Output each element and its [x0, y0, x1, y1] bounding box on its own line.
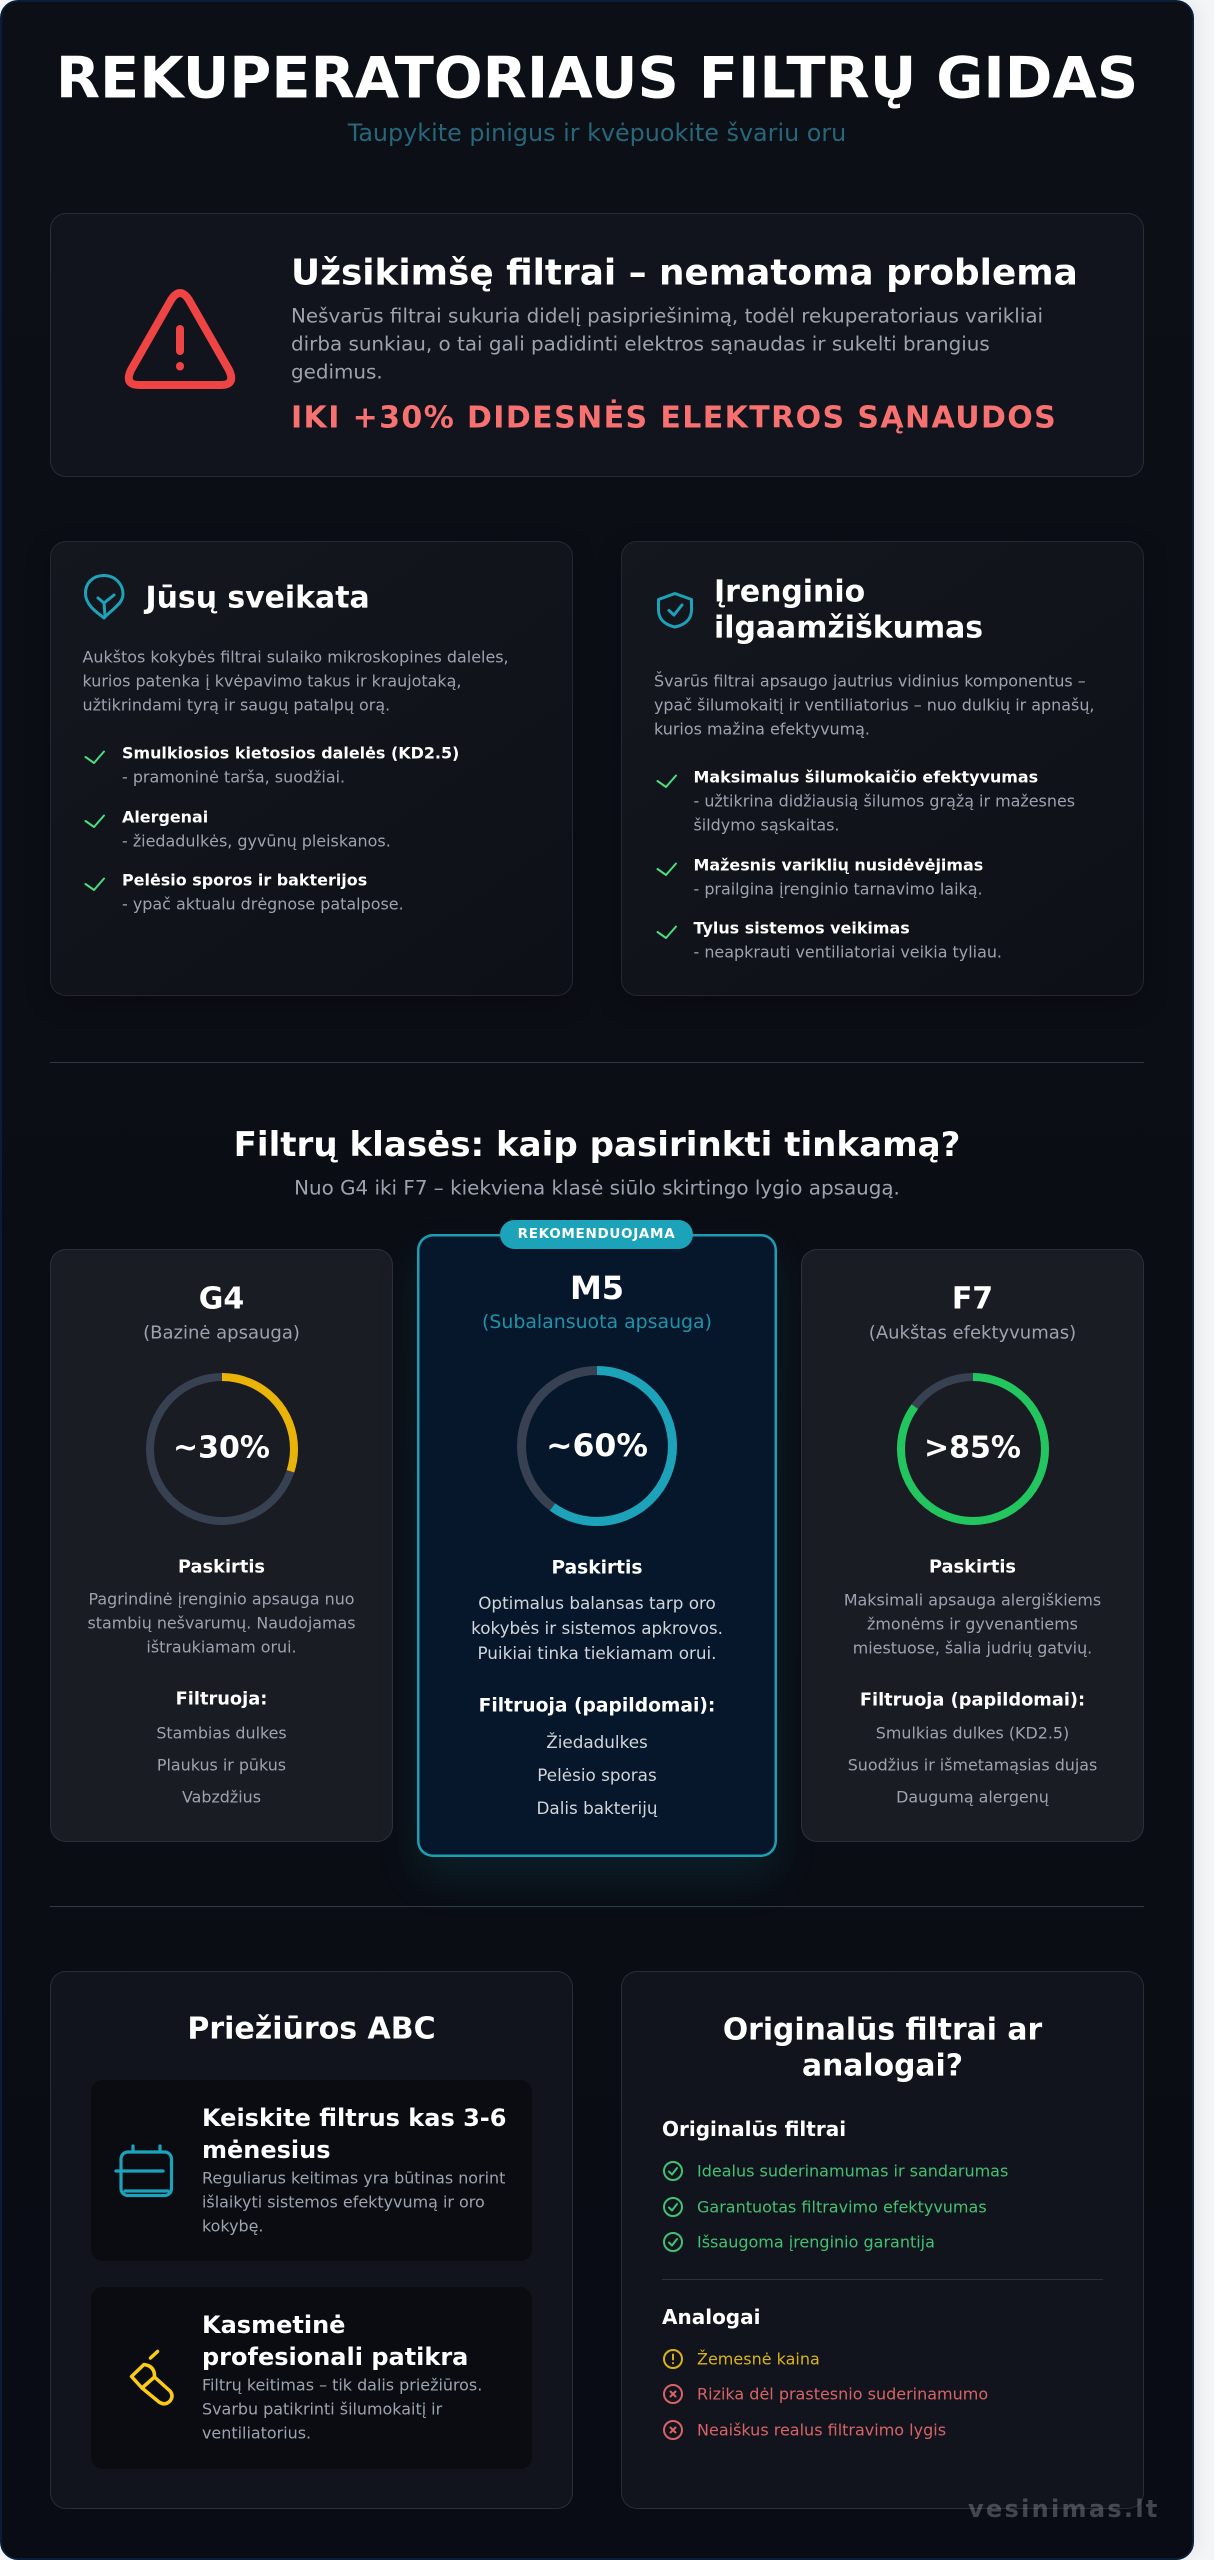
tip: annual inspection	[91, 2287, 532, 2469]
icon: shield check	[657, 592, 693, 628]
heading: Jūsų sveikata	[146, 580, 370, 616]
purpose text	[87, 1590, 356, 1656]
intro text: Aukštos kokybės filtrai sulaiko mikroskopines daleles,	[82, 648, 509, 666]
class name: F7	[952, 1282, 993, 1316]
panel: device longevity	[621, 541, 1144, 996]
panel: G4 filter	[50, 1249, 393, 1842]
purpose text: kokybės ir sistemos apkrovos.	[471, 1618, 723, 1638]
tip text: išlaikyti sistemos efektyvumą ir oro	[202, 2192, 485, 2212]
filters heading: Filtruoja:	[176, 1688, 267, 1709]
purpose text: Maksimali apsauga alergiškiems	[844, 1590, 1101, 1610]
section heading: filter classes: Nuo G4 iki F7 – kiekviena klasė siūlo skirtingo lygio apsaugą.	[294, 1176, 900, 1200]
description: gedimus.	[291, 360, 383, 384]
filters list: Plaukus ir pūkus	[157, 1756, 286, 1774]
heading	[714, 574, 983, 646]
tip text	[202, 2376, 482, 2442]
list item: mould and bacteria: Pelėsio sporos ir bakterijos	[122, 870, 367, 890]
list item: mould and bacteria: - ypač aktualu drėgnose patalpose.	[122, 894, 404, 914]
tip heading: Keiskite filtrus kas 3-6	[202, 2104, 506, 2132]
list item: fine particles: - pramoninė tarša, suodžiai.	[122, 768, 345, 786]
purpose text: Pagrindinė įrenginio apsauga nuo	[89, 1590, 354, 1608]
tip heading	[202, 2104, 506, 2164]
description: Nešvarūs filtrai sukuria didelį pasipriešinimą, todėl rekuperatoriaus varikliai	[291, 304, 1043, 328]
list item: motor wear	[656, 856, 983, 898]
heading: Originalūs filtrai ar	[723, 2012, 1042, 2048]
tip text	[202, 2168, 505, 2236]
list item: allergens: - žiedadulkės, gyvūnų pleiskanos.	[122, 832, 391, 850]
purpose text: ištraukiamam orui.	[146, 1638, 297, 1656]
subheading: originals: Originalūs filtrai	[662, 2117, 846, 2141]
list item: mould and bacteria	[84, 870, 404, 914]
intro text: ypač šilumokaitį ir ventiliatorius – nuo dulkių ir apnašų,	[654, 696, 1094, 714]
tip text: Filtrų keitimas – tik dalis priežiūros.	[202, 2376, 482, 2394]
filters heading: Filtruoja (papildomai):	[479, 1696, 715, 1716]
filters list	[156, 1724, 287, 1806]
intro text: užtikrindami tyrą ir saugų patalpų orą.	[82, 696, 390, 714]
gauge: 60 percent: ~60%	[546, 1428, 648, 1464]
class name: G4	[199, 1282, 244, 1316]
intro text: kurios patenka į kvėpavimo takus ir kraujotaką,	[82, 672, 461, 690]
list item: heat exchanger: šildymo sąskaitas.	[694, 816, 839, 834]
icon: health leaf	[84, 574, 124, 620]
purpose heading: Paskirtis	[552, 1558, 642, 1578]
description: dirba sunkiau, o tai gali padidinti elektros sąnaudas ir sukelti brangius	[291, 332, 990, 356]
panel: F7 filter	[801, 1249, 1144, 1842]
list item: quiet operation: Tylus sistemos veikimas	[694, 918, 910, 938]
panel: M5 filter recommended	[417, 1234, 777, 1857]
filters list: Smulkias dulkes (KD2.5)	[876, 1724, 1069, 1742]
heading: Užsikimšę filtrai – nematoma problema	[291, 252, 1078, 294]
panel: clogged filters problem	[50, 213, 1144, 477]
pro: compatibility: Idealus suderinamumas ir sandarumas	[697, 2162, 1008, 2180]
tip: replace filters	[91, 2080, 532, 2261]
list item: heat exchanger: - užtikrina didžiausią šilumos grąžą ir mažesnes	[694, 792, 1075, 810]
filters heading: Filtruoja (papildomai):	[860, 1690, 1085, 1710]
list item: fine particles	[84, 744, 459, 786]
con: compatibility risk: Rizika dėl prastesnio suderinamumo	[697, 2384, 988, 2404]
panel: your health	[50, 541, 573, 996]
intro text: kurios mažina efektyvumą.	[654, 720, 870, 738]
heading: analogai?	[802, 2048, 963, 2084]
purpose text: Puikiai tinka tiekiamam orui.	[477, 1643, 717, 1663]
tip heading: profesionali patikra	[202, 2343, 468, 2371]
tip heading: mėnesius	[202, 2136, 331, 2164]
list item: heat exchanger: Maksimalus šilumokaičio efektyvumas	[694, 768, 1038, 786]
icon: warning triangle	[124, 289, 236, 389]
gauge: 30 percent: ~30%	[173, 1430, 270, 1466]
gauge: 85 percent	[897, 1373, 1049, 1525]
purpose text	[844, 1590, 1101, 1658]
section heading: filter classes: Filtrų klasės: kaip pasirinkti tinkamą?	[234, 1125, 960, 1165]
heading: Priežiūros ABC	[187, 2012, 436, 2046]
panel: maintenance ABC	[50, 1971, 573, 2509]
note: lower price: Žemesnė kaina	[697, 2349, 820, 2368]
tip heading	[202, 2311, 468, 2371]
filters list: Daugumą alergenų	[896, 1788, 1049, 1806]
purpose heading: Paskirtis	[178, 1556, 265, 1578]
badge: recommended	[500, 1220, 693, 1249]
gauge: 30 percent	[146, 1373, 298, 1525]
list item: motor wear: - prailgina įrenginio tarnavimo laiką.	[694, 880, 983, 898]
purpose text: Optimalus balansas tarp oro	[478, 1593, 716, 1613]
tip text: Svarbu patikrinti šilumokaitį ir	[202, 2400, 442, 2418]
intro text	[654, 671, 1094, 738]
con: unclear filtration: Neaiškus realus filtravimo lygis	[697, 2420, 946, 2440]
filters list	[536, 1732, 658, 1818]
icon: calendar	[114, 2144, 174, 2198]
tip text: ventiliatorius.	[202, 2424, 311, 2442]
intro text	[82, 648, 509, 714]
filters list: Stambias dulkes	[156, 1724, 287, 1742]
heading: Įrenginio	[714, 574, 865, 610]
class name: M5	[570, 1269, 624, 1307]
list item: quiet operation	[656, 918, 1002, 962]
filters list: Vabzdžius	[182, 1788, 261, 1806]
badge: recommended: REKOMENDUOJAMA	[518, 1226, 675, 1242]
heading: ilgaamžiškumas	[714, 610, 983, 646]
subheading: analogues: Analogai	[662, 2305, 760, 2329]
tip text: Reguliarus keitimas yra būtinas norint	[202, 2168, 505, 2188]
pro: efficiency: Garantuotas filtravimo efektyvumas	[697, 2197, 987, 2216]
pro: warranty: Išsaugoma įrenginio garantija	[697, 2232, 935, 2252]
filters list: Žiedadulkes	[546, 1732, 648, 1752]
panel: original filters or analogues	[621, 1971, 1144, 2509]
description	[291, 304, 1043, 384]
filters list	[848, 1724, 1097, 1806]
subtitle: Taupykite pinigus ir kvėpuokite švariu oru	[348, 119, 846, 147]
highlight stat: IKI +30% DIDESNĖS ELEKTROS SĄNAUDOS	[291, 400, 1057, 436]
purpose text: miestuose, šalia judrių gatvių.	[853, 1638, 1092, 1658]
list item: motor wear: Mažesnis variklių nusidėvėjimas	[694, 856, 983, 874]
purpose heading: Paskirtis	[929, 1556, 1016, 1578]
filters list: Suodžius ir išmetamąsias dujas	[848, 1756, 1097, 1774]
gauge: 60 percent	[517, 1366, 677, 1526]
purpose text: stambių nešvarumų. Naudojamas	[87, 1614, 356, 1632]
list item: allergens: Alergenai	[122, 808, 208, 826]
tip heading: Kasmetinė	[202, 2311, 345, 2339]
list item: quiet operation: - neapkrauti ventiliatoriai veikia tyliau.	[694, 942, 1002, 962]
purpose text: žmonėms ir gyvenantiems	[867, 1614, 1078, 1634]
section heading: filter classes	[234, 1125, 960, 1200]
class subtitle: (Bazinė apsauga)	[143, 1322, 300, 1343]
intro text: Švarūs filtrai apsaugo jautrius vidinius komponentus –	[654, 672, 1086, 690]
tip text: kokybę.	[202, 2216, 264, 2236]
watermark: vesinimas.lt	[968, 2495, 1160, 2523]
purpose text	[471, 1593, 723, 1663]
class subtitle: (Subalansuota apsauga)	[482, 1311, 712, 1333]
heading	[723, 2012, 1042, 2084]
filters list: Dalis bakterijų	[536, 1798, 658, 1818]
title: REKUPERATORIAUS FILTRŲ GIDAS	[56, 44, 1138, 112]
list item: heat exchanger	[656, 768, 1075, 834]
filters list: Pelėsio sporas	[537, 1765, 657, 1785]
icon: flashlight	[130, 2350, 174, 2406]
list item: allergens	[84, 808, 391, 850]
gauge: 85 percent: >85%	[924, 1430, 1021, 1466]
class subtitle: (Aukštas efektyvumas)	[869, 1322, 1076, 1343]
list item: fine particles: Smulkiosios kietosios dalelės (KD2.5)	[122, 744, 459, 762]
